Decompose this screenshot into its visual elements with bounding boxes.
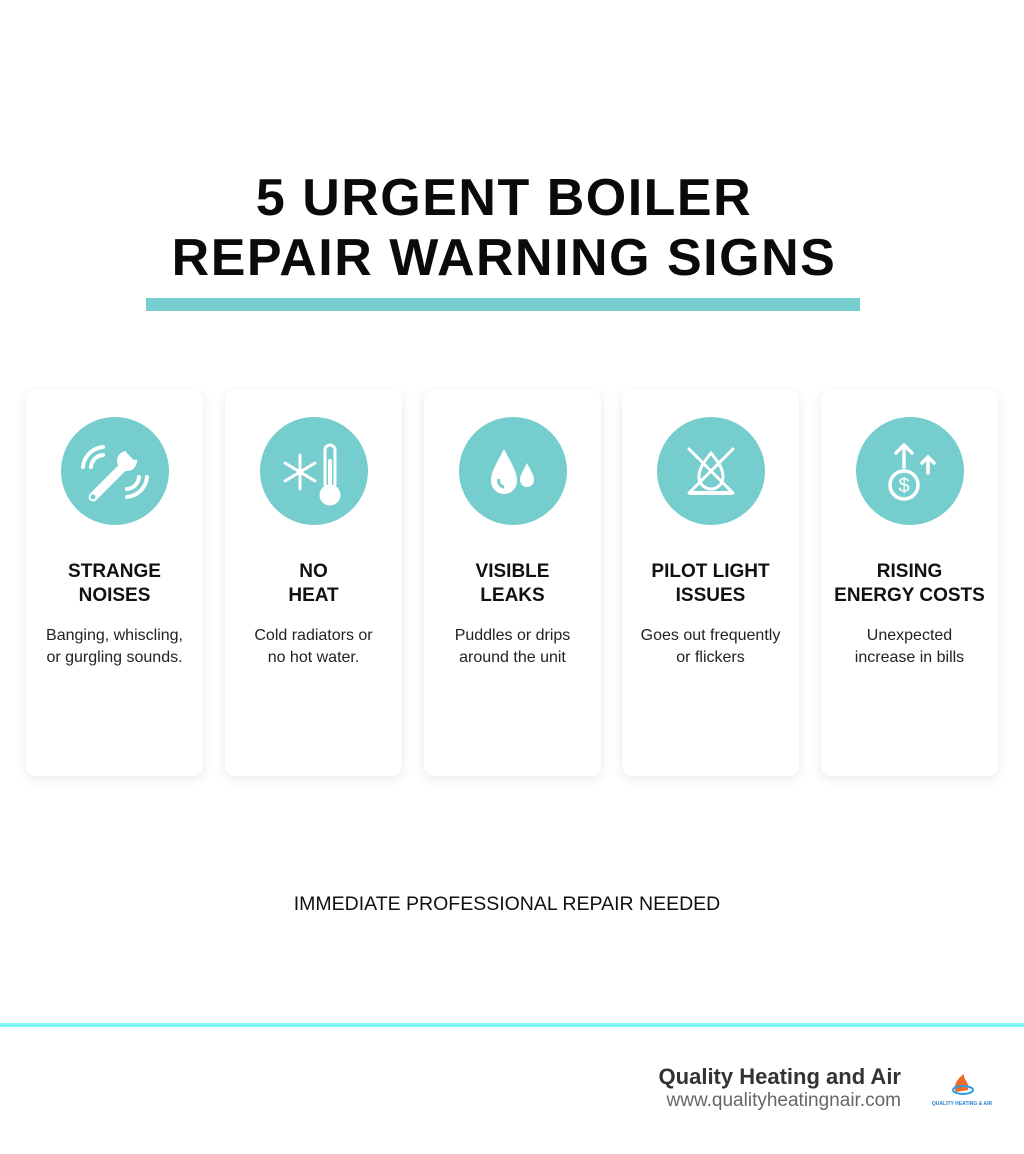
icon: dollar coin with arrows: $ (898, 475, 910, 497)
description: or gurgling sounds. (46, 649, 183, 666)
heading: LEAKS (480, 585, 545, 606)
heading (651, 561, 770, 606)
description: increase in bills (855, 649, 964, 666)
icon: wrench with sound waves (61, 417, 169, 525)
heading (834, 561, 985, 606)
panel: strange noises (26, 390, 203, 776)
description (641, 627, 780, 666)
description: Banging, whiscling, (46, 627, 183, 644)
footer url: www.qualityheatingnair.com (667, 1090, 901, 1111)
heading: VISIBLE (476, 561, 549, 582)
panel: rising energy costs (821, 390, 998, 776)
footer divider (0, 1023, 1024, 1027)
description (46, 627, 183, 666)
icon: snowflake and thermometer (260, 417, 368, 525)
description: Puddles or drips (455, 627, 570, 644)
icon: crossed-out flame (657, 417, 765, 525)
footer company name: Quality Heating and Air (659, 1064, 901, 1089)
title: 5 URGENT BOILER (256, 169, 752, 227)
heading (68, 561, 161, 606)
heading: ISSUES (676, 585, 745, 606)
heading (476, 561, 549, 606)
description: or flickers (676, 649, 745, 666)
heading: PILOT LIGHT (651, 561, 770, 582)
description (455, 627, 570, 666)
logo (932, 1074, 992, 1107)
title underline (146, 298, 860, 311)
title (172, 169, 836, 287)
heading: RISING (877, 561, 942, 582)
callout text: IMMEDIATE PROFESSIONAL REPAIR NEEDED (294, 893, 720, 915)
description: no hot water. (268, 649, 359, 666)
panel: visible leaks (424, 390, 601, 776)
icon: water drops (459, 417, 567, 525)
heading (288, 561, 339, 606)
heading: ENERGY COSTS (834, 585, 985, 606)
description: Goes out frequently (641, 627, 780, 644)
icon: dollar coin with arrows (856, 417, 964, 525)
heading: STRANGE (68, 561, 161, 582)
title: REPAIR WARNING SIGNS (172, 229, 836, 287)
panel: pilot light issues (622, 390, 799, 776)
description: Unexpected (867, 627, 952, 644)
heading: HEAT (288, 585, 339, 606)
description: around the unit (459, 649, 566, 666)
description: Cold radiators or (254, 627, 373, 644)
heading: NO (299, 561, 328, 582)
logo: QUALITY HEATING & AIR (932, 1101, 992, 1107)
panel: no heat (225, 390, 402, 776)
description (254, 627, 373, 666)
description (855, 627, 964, 666)
heading: NOISES (79, 585, 150, 606)
